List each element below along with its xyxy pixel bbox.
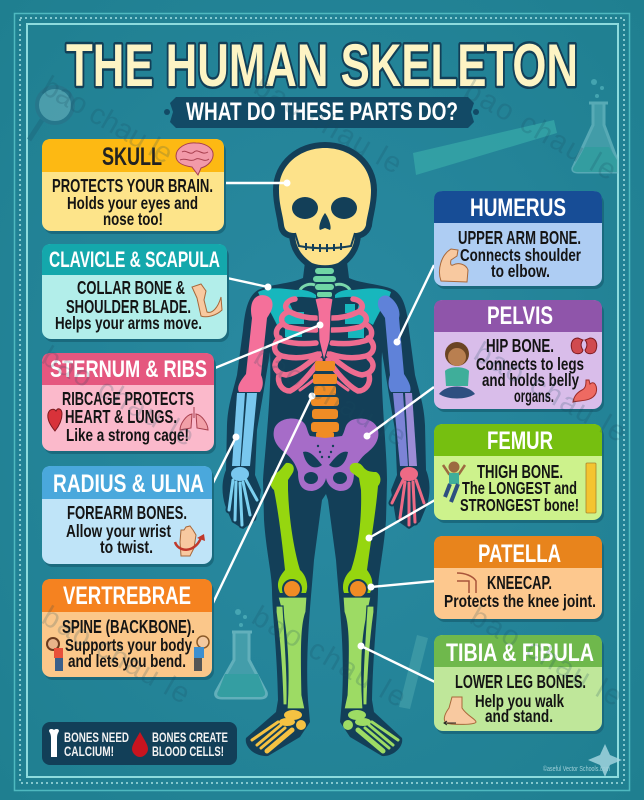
right hand <box>392 467 424 525</box>
panel: clavicle and scapula: Helps your arms move. <box>55 313 202 333</box>
watermarks: bao chau le <box>458 74 622 187</box>
panel: sternum and ribs: RIBCAGE PROTECTS <box>62 389 194 409</box>
neck vertebrae <box>300 268 350 297</box>
icon: twisting hand <box>175 526 205 556</box>
panel: femur: THIGH BONE. <box>477 462 563 482</box>
left hand <box>229 467 257 525</box>
tibia and fibula <box>276 597 374 709</box>
right foot <box>343 710 398 751</box>
skull <box>279 148 371 265</box>
panel: humerus: UPPER ARM BONE. <box>458 228 581 248</box>
panel: vertebrae <box>42 579 214 680</box>
leader lines <box>213 180 435 682</box>
panel: pelvis: organs. <box>514 386 554 406</box>
right humerus <box>378 295 411 392</box>
watermarks: bao chau le <box>464 600 628 713</box>
sparkle and credit: ©aseful Vector Schools.com <box>543 765 610 773</box>
fact box: BONES CREATE <box>152 729 228 745</box>
panel: clavicle and scapula: CLAVICLE & SCAPULA <box>49 247 220 272</box>
background icon: ruler <box>413 120 557 175</box>
watermarks: bao chau le <box>248 70 407 181</box>
lumbar spine <box>311 361 339 438</box>
panel: femur: The LONGEST and <box>462 478 577 498</box>
panel: tibia and fibula: TIBIA & FIBULA <box>446 639 594 667</box>
panel: tibia and fibula: and stand. <box>485 706 553 726</box>
left humerus <box>238 295 273 392</box>
patellas <box>283 580 367 598</box>
icon: waving arm <box>192 284 222 317</box>
icon: lungs <box>180 407 208 430</box>
panel: humerus <box>434 191 604 289</box>
panel: pelvis: and holds belly <box>482 370 579 390</box>
panel: pelvis: PELVIS <box>487 302 553 330</box>
icon: stomach <box>573 380 597 402</box>
panel: tibia and fibula: Help you walk <box>475 691 564 711</box>
panel: clavicle and scapula: COLLAR BONE & <box>77 278 185 298</box>
femurs <box>270 463 380 593</box>
panel: tibia and fibula <box>434 635 604 734</box>
background icon: ruler lower <box>399 635 428 709</box>
panel: vertebrae: and lets you bend. <box>68 651 186 671</box>
panel: vertebrae: Supports your body <box>65 635 192 655</box>
panel: femur: FEMUR <box>487 427 553 455</box>
panel: pelvis <box>434 300 604 412</box>
icon: kidneys <box>571 338 597 354</box>
panel: sternum and ribs: HEART & LUNGS. <box>65 407 177 427</box>
icon: bone <box>49 729 59 757</box>
panel: patella <box>434 536 604 622</box>
left foot <box>252 710 306 751</box>
background icon: flask top <box>573 79 617 172</box>
panel: vertebrae: SPINE (BACKBONE). <box>62 617 195 637</box>
watermarks: bao chau le <box>468 336 632 449</box>
subtitle banner: WHAT DO THESE PARTS DO? <box>186 98 458 126</box>
panel: clavicle and scapula: SHOULDER BLADE. <box>66 297 191 317</box>
panel: patella: KNEECAP. <box>487 573 552 593</box>
panel: skull: nose too! <box>103 209 163 229</box>
panel: patella: Protects the knee joint. <box>444 591 596 611</box>
icon: blood drop <box>132 732 148 757</box>
clavicle and scapula <box>258 288 391 338</box>
panel: radius and ulna: FOREARM BONES. <box>67 503 187 523</box>
left forearm <box>232 393 257 466</box>
icon: knee <box>457 573 476 593</box>
panel: sternum and ribs: Like a strong cage! <box>66 425 189 445</box>
sparkle and credit <box>543 744 622 777</box>
watermarks: bao chau le <box>248 340 412 453</box>
panel: tibia and fibula: LOWER LEG BONES. <box>455 672 586 692</box>
watermarks: bao chau le <box>36 600 195 711</box>
ribs <box>275 299 373 391</box>
panel: sternum and ribs <box>42 353 216 454</box>
panel: patella: PATELLA <box>478 540 561 568</box>
watermarks <box>36 70 632 714</box>
panel: femur: STRONGEST bone! <box>460 495 579 515</box>
panel: vertebrae: VERTREBRAE <box>63 582 191 610</box>
fact box: BLOOD CELLS! <box>152 743 224 759</box>
panel: radius and ulna: RADIUS & ULNA <box>53 470 204 498</box>
icon: girl bending <box>47 638 63 671</box>
icon: flexed arm <box>439 249 468 282</box>
panel: radius and ulna <box>42 466 214 567</box>
background icon: magnifier <box>29 87 73 140</box>
watermarks: bao chau le <box>247 600 411 714</box>
panel: skull: Holds your eyes and <box>67 193 198 213</box>
panel: pelvis: Connects to legs <box>476 354 584 374</box>
sternum <box>315 298 333 361</box>
panel: femur <box>434 424 604 523</box>
panel: skull <box>42 139 226 234</box>
icon: boy bending <box>194 636 209 671</box>
background icon: flask bottom <box>216 609 266 698</box>
fact box <box>42 722 237 765</box>
panel: skull: PROTECTS YOUR BRAIN. <box>52 175 213 196</box>
icon: brain <box>176 143 213 175</box>
panel: radius and ulna: to twist. <box>100 537 153 557</box>
icon: sitting child <box>439 342 475 398</box>
panel: humerus: Connects shoulder <box>460 245 581 265</box>
panel: clavicle and scapula <box>42 244 229 342</box>
icon: jumping child <box>443 462 465 502</box>
panel: skull: SKULL <box>102 143 162 171</box>
icon: ruler <box>586 463 596 513</box>
fact box: BONES NEED <box>64 729 129 745</box>
body silhouette <box>222 262 430 756</box>
panel: humerus: to elbow. <box>491 261 550 281</box>
pelvis <box>274 418 378 491</box>
panel: humerus: HUMERUS <box>470 194 566 222</box>
watermarks: bao chau le <box>36 340 200 453</box>
skeleton figure <box>222 148 430 756</box>
icon: heart <box>48 409 62 431</box>
right forearm <box>393 393 417 466</box>
panel: pelvis: HIP BONE. <box>486 336 554 356</box>
fact box: CALCIUM! <box>64 743 114 759</box>
watermarks: bao chau le <box>36 70 178 171</box>
panel: sternum and ribs: STERNUM & RIBS <box>50 356 207 383</box>
icon: foot <box>444 697 476 725</box>
panel: radius and ulna: Allow your wrist <box>66 521 171 541</box>
